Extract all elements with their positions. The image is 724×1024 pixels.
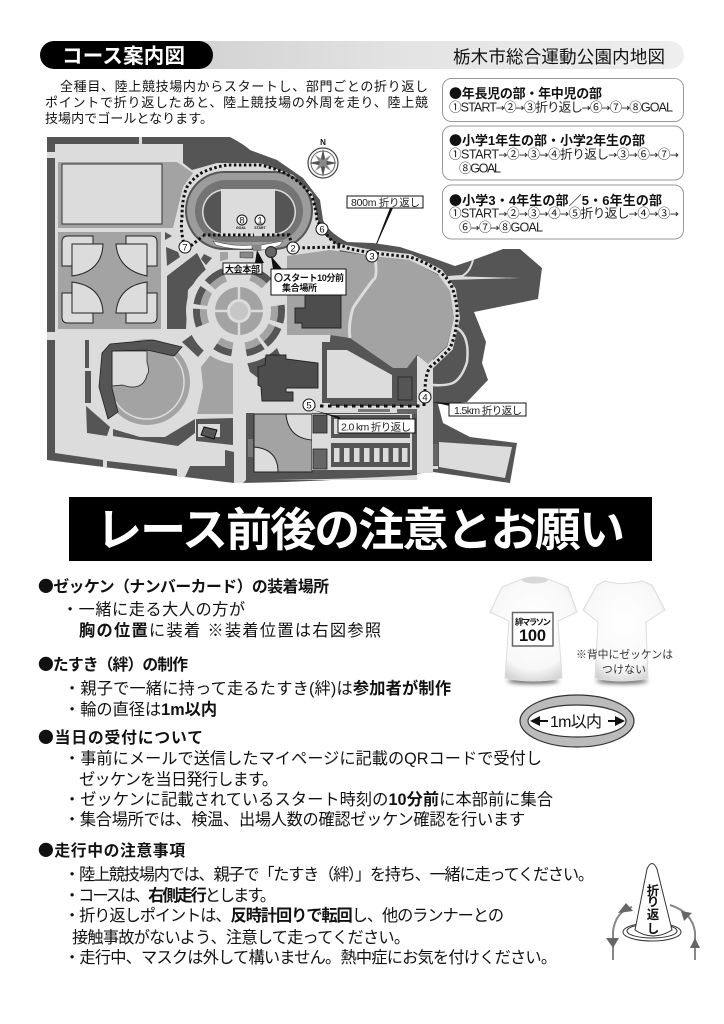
section: reception: ・ゼッケンに記載されているスタート時刻の10分前に本部前に集合 xyxy=(64,790,553,809)
section: running notes: ●走行中の注意事項 xyxy=(38,838,185,861)
quadrant courts xyxy=(58,232,161,329)
label: 800m turnaround xyxy=(347,196,423,244)
section: running notes: 接触事故がないよう、注意して走ってください。 xyxy=(72,929,410,947)
icon: turnaround cone: 折 xyxy=(647,883,660,898)
label: headquarters xyxy=(223,250,264,274)
panel: route for grade 1-2 division: ●小学1年生の部・小学2年生の部 xyxy=(449,130,645,149)
intro text: 技場内でゴールとなります。 xyxy=(45,111,213,126)
note: no bib on back xyxy=(576,647,673,676)
icon: turnaround cone: 返 xyxy=(647,908,660,922)
upper-left field xyxy=(58,162,193,228)
label: 1.5km turnaround xyxy=(432,402,526,417)
label: headquarters: 大会本部 xyxy=(225,264,260,274)
section: running notes: ・走行中、マスクは外して構いません。熱中症にお気を付けください。 xyxy=(64,949,557,967)
east buildings xyxy=(322,342,412,403)
checkpoint markers: 4 xyxy=(422,392,428,404)
course dotted route xyxy=(181,165,457,406)
gate block xyxy=(196,418,233,445)
light ground areas xyxy=(47,137,433,483)
compass xyxy=(308,138,338,178)
course map xyxy=(47,137,542,483)
section: running notes: ・陸上競技場内では、親子で「たすき（絆）」を持ち、一緒に走ってください。 xyxy=(64,866,594,884)
section: sash making: ●たすき（絆）の制作 xyxy=(38,652,188,675)
main stadium xyxy=(185,171,313,262)
panel: route for grade 1-2 division: ⑧GOAL xyxy=(459,162,501,176)
icon: t-shirt front with bib: 100 xyxy=(519,627,546,645)
panel: route for grade 3-6 division: ①START→②→③→④→⑤折り返し→④→③→ xyxy=(449,206,679,220)
label: assembly point xyxy=(271,256,346,295)
icon: t-shirt front with bib xyxy=(490,576,577,684)
checkpoint markers: 6 xyxy=(319,224,325,236)
section: sash making: ・輪の直径は1m以内 xyxy=(64,701,217,719)
label: assembly point: 集合場所 xyxy=(282,282,317,293)
section: running notes: ・コースは、右側走行とします。 xyxy=(64,887,276,905)
label: 2.0km turnaround xyxy=(313,410,415,434)
panel: route for grade 1-2 division xyxy=(442,126,684,180)
checkpoint markers: 3 xyxy=(369,252,375,262)
large green area xyxy=(287,247,520,388)
compass: N xyxy=(320,138,326,147)
checkpoint markers: START xyxy=(254,226,267,230)
panel: route for kindergarten division: ●年長児の部・年中児の部 xyxy=(449,83,602,102)
section: sash making: ・親子で一緒に持って走るたすき(絆)は参加者が制作 xyxy=(64,679,451,698)
baseball stadium xyxy=(99,339,190,425)
section: bib placement: 胸の位置に装着 ※装着位置は右図参照 xyxy=(79,622,381,640)
section: bib placement: ・一緒に走る大人の方が xyxy=(62,601,245,619)
buildings xyxy=(258,295,341,401)
intro text: ポイントで折り返したあと、陸上競技場の外周を走り、陸上競 xyxy=(45,95,428,110)
south-east parking block xyxy=(433,442,512,478)
section: sash making xyxy=(38,652,451,719)
panel: route for grade 3-6 division: ⑥→⑦→⑧GOAL xyxy=(459,220,543,234)
note: no bib on back: つけない xyxy=(602,663,646,676)
icon: turnaround cone xyxy=(606,864,700,960)
checkpoint markers: 2 xyxy=(290,244,296,254)
panel: route for grade 3-6 division: ●小学3・4年生の部／5・6年生の部 xyxy=(449,190,662,209)
checkpoint markers: 1 xyxy=(257,216,263,226)
section: reception: ・集合場所では、検温、出場人数の確認ゼッケン確認を行います xyxy=(64,811,525,829)
label: 800m turnaround: 800m 折り返し xyxy=(351,196,420,209)
panel: route for grade 3-6 division xyxy=(442,185,684,239)
section: reception: ●当日の受付について xyxy=(38,725,203,748)
panel: route for kindergarten division: ①START→②→③折り返し→⑥→⑦→⑧GOAL xyxy=(449,100,673,114)
section: reception: ゼッケンを当日発行します。 xyxy=(79,771,278,789)
section: running notes xyxy=(38,838,594,967)
header: course map title bar xyxy=(40,41,684,69)
icon: sash ring 1m: 1m以内 xyxy=(550,713,602,731)
southern sports complex xyxy=(246,409,417,480)
section: bib placement: ●ゼッケン（ナンバーカード）の装着場所 xyxy=(38,574,329,597)
section: reception: ・事前にメールで送信したマイページに記載のQRコードで受付し xyxy=(64,750,542,768)
checkpoint markers: 7 xyxy=(182,242,188,254)
icon: t-shirt front with bib: 絆マラソン xyxy=(515,617,551,627)
checkpoint markers: GOAL xyxy=(236,226,247,230)
icon: t-shirt back xyxy=(583,581,665,684)
label: 2.0km turnaround: 2.0 km 折り返し xyxy=(341,420,411,434)
note: no bib on back: ※背中にゼッケンは xyxy=(576,647,673,661)
icon: turnaround cone: し xyxy=(647,922,659,936)
icon: sash ring 1m xyxy=(520,695,634,747)
header: course map title bar: 栃木市総合運動公園内地図 xyxy=(453,47,665,67)
map base outline xyxy=(47,137,542,483)
checkpoint markers xyxy=(179,215,431,412)
label: assembly point: 〇スタート10分前 xyxy=(274,272,344,283)
banner heading: レース前後の注意とお願い xyxy=(96,504,625,556)
section: reception xyxy=(38,725,553,829)
panel: route for kindergarten division xyxy=(442,78,684,122)
checkpoint markers: 8 xyxy=(239,216,245,226)
assembly point marker xyxy=(266,246,276,258)
gray lawn block xyxy=(197,353,233,414)
section: bib placement xyxy=(38,574,381,640)
icon: turnaround cone: り xyxy=(647,895,659,909)
section: running notes: ・折り返しポイントは、反時計回りで転回し、他のランナーとの xyxy=(64,907,504,925)
dark park patches xyxy=(85,232,280,446)
label: 1.5km turnaround: 1.5km 折り返し xyxy=(454,404,522,417)
checkpoint markers: 5 xyxy=(306,400,312,412)
intro text xyxy=(45,79,428,126)
panel: route for grade 1-2 division: ①START→②→③→④折り返し→③→⑥→⑦→ xyxy=(449,148,679,162)
header: course map title bar: コース案内図 xyxy=(62,45,185,68)
central plaza xyxy=(186,258,292,364)
intro text: 全種目、陸上競技場内からスタートし、部門ごとの折り返し xyxy=(60,79,428,94)
